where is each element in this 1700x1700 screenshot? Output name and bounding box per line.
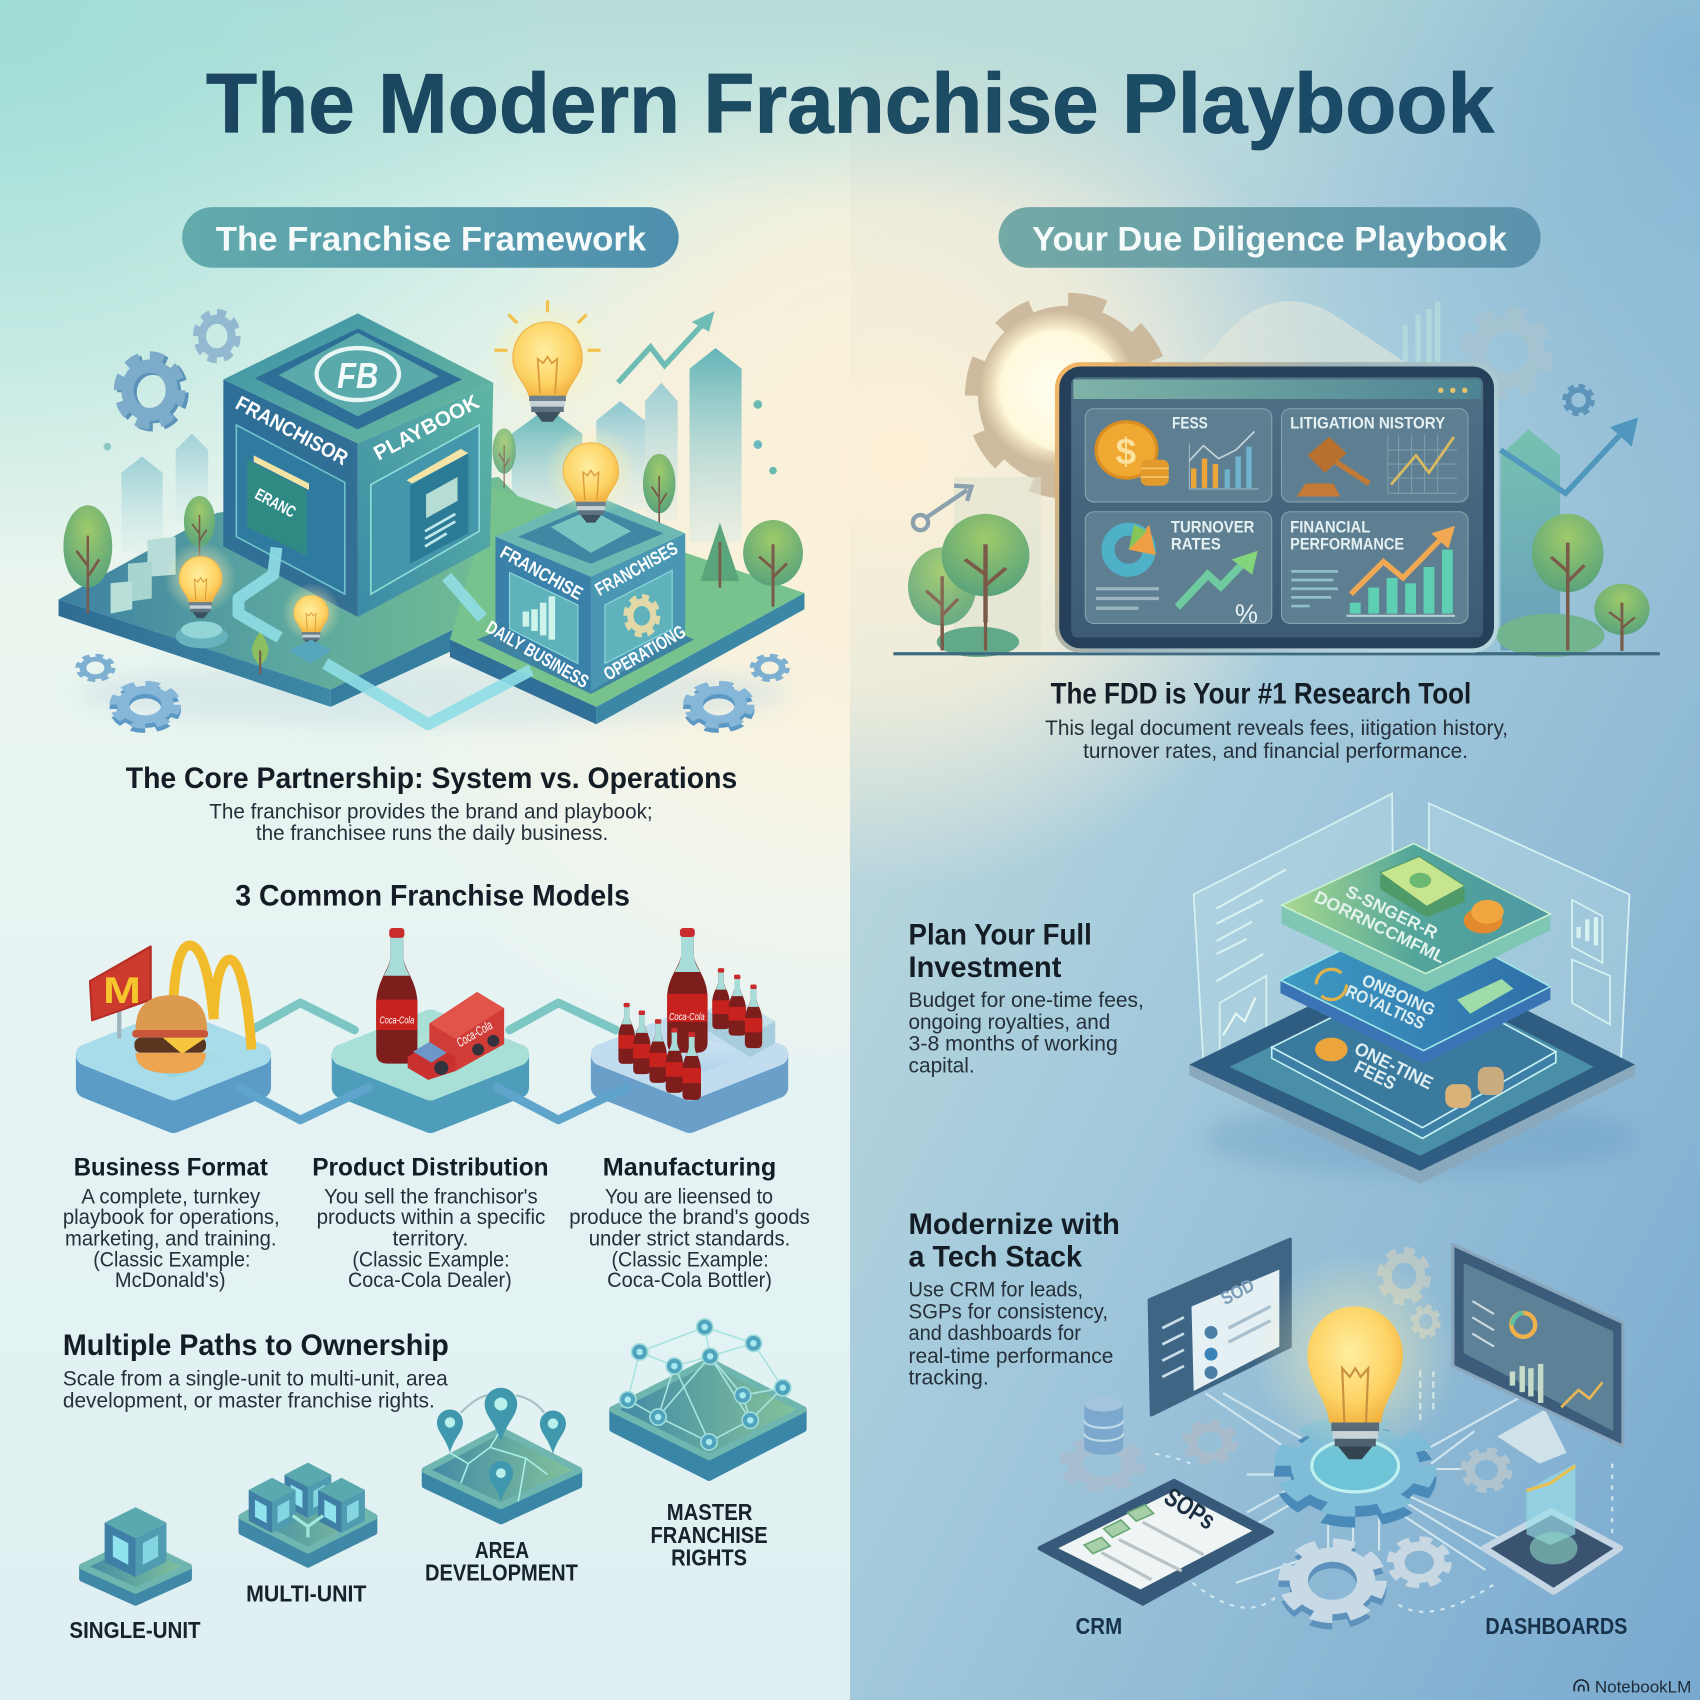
panel: initial investment layer: S-SNGER-R [1343, 881, 1441, 943]
text block: business format: playbook for operations, [63, 1206, 280, 1229]
text block: product distribution: (Classic Example: [352, 1248, 510, 1271]
icon: CRM window: SOD [1217, 1274, 1258, 1309]
icon: growth arrow [618, 311, 714, 383]
text block: manufacturing: under strict standards. [589, 1228, 790, 1251]
icon: CRM window [1149, 1239, 1290, 1415]
illustration: franchisor and franchisee isometric city [59, 298, 804, 730]
text block: manufacturing: You are lieensed to [605, 1185, 773, 1208]
text block: product distribution: Product Distribution [312, 1153, 549, 1181]
watermark: NotebookLM: NotebookLM [1595, 1677, 1691, 1696]
text block: product distribution: products within a specific [317, 1206, 545, 1229]
label: area development [425, 1537, 578, 1586]
diagram: three franchise models [87, 928, 777, 1122]
icon: franchise manual [247, 455, 309, 556]
icon: small gears [1186, 1251, 1509, 1624]
text block: multiple paths to ownership: development, or master franchise rights. [63, 1389, 435, 1412]
label: area development: AREA [475, 1537, 529, 1563]
icon: database on gear [1065, 1396, 1140, 1488]
icon: single-unit [82, 1507, 189, 1602]
panel: litigation history [1282, 409, 1468, 502]
arrow: glowing data ribbons [239, 548, 531, 724]
panel: business format platform [87, 1020, 260, 1122]
icon: key arrow [913, 486, 971, 530]
icon: cola bottle and truck [376, 928, 504, 1080]
text block: modernize with a tech stack: tracking. [909, 1367, 989, 1390]
illustration: tech stack hub [1040, 1239, 1623, 1624]
panel: ongoing royalties layer [1280, 914, 1550, 1064]
text block: manufacturing [569, 1153, 810, 1292]
icon: bottling line [618, 928, 775, 1100]
icon: light bulbs [164, 298, 638, 664]
text block: business format: Business Format [74, 1153, 268, 1181]
label: OPERATIONG: OPERATIONG [600, 621, 689, 684]
heading pill: Your Due Diligence Playbook: Your Due Diligence Playbook [1032, 220, 1508, 258]
icon: tablet base [1189, 954, 1635, 1184]
heading pill: The Franchise Framework [182, 207, 679, 268]
text block: business format [63, 1153, 280, 1292]
text block: core partnership: The Core Partnership: System vs. Operations [126, 763, 737, 795]
icon: restaurant sign and arches: M [103, 970, 141, 1011]
icon: cola bottle and truck: Coca-Cola [379, 1015, 415, 1026]
icon: franchise manual: ERANC [252, 485, 299, 522]
label: master franchise rights: RIGHTS [671, 1545, 747, 1571]
label: PLAYBOOK: PLAYBOOK [370, 390, 483, 465]
icon: master franchise rights network [613, 1319, 803, 1478]
panel: fees: FESS [1172, 414, 1208, 432]
text block: plan your full investment: Plan Your Full [909, 919, 1092, 951]
label: FRANCHISES: FRANCHISES [591, 537, 681, 600]
text block: business format: (Classic Example: [93, 1248, 250, 1271]
panel: franchisor cube [223, 313, 493, 617]
icon: background towers [104, 348, 777, 553]
text block: modernize with a tech stack [909, 1209, 1120, 1390]
panel: litigation history: LITIGATION NISTORY [1290, 414, 1445, 432]
text block: plan your full investment: capital. [909, 1054, 975, 1077]
label: FRANCHISE: FRANCHISE [497, 541, 587, 604]
text block: plan your full investment: Investment [909, 952, 1062, 984]
illustration: investment layers [1189, 794, 1637, 1184]
icon: bottling line: Coca-Cola [669, 1012, 705, 1023]
text block: modernize with a tech stack: Use CRM for leads, [909, 1279, 1083, 1302]
text block: manufacturing: (Classic Example: [611, 1248, 769, 1271]
icon: multi-unit [242, 1463, 374, 1564]
panel: turnover rates: TURNOVER [1171, 518, 1255, 536]
panel: turnover rates: % [1235, 598, 1258, 628]
panel: fees: $ [1116, 431, 1136, 472]
heading pill: The Franchise Framework: The Franchise Framework [216, 220, 647, 258]
icon: brand logo [317, 348, 399, 400]
text block: product distribution: Coca-Cola Dealer) [348, 1269, 512, 1292]
panel: one-time fees layer: ONE-TINE [1351, 1037, 1437, 1093]
heading: 3 common franchise models: 3 Common Franchise Models [235, 880, 630, 912]
icon: burger [132, 995, 208, 1073]
icon: mini gear [626, 597, 658, 634]
text block: plan your full investment: 3-8 months of working [909, 1033, 1118, 1056]
label: area development: DEVELOPMENT [425, 1560, 578, 1586]
illustration: FDD tablet scene [893, 301, 1660, 657]
text block: product distribution: You sell the franchisor's [324, 1185, 538, 1208]
text block: business format: McDonald's) [115, 1269, 226, 1292]
panel: initial investment layer [1282, 843, 1550, 992]
text block: manufacturing: Manufacturing [603, 1153, 776, 1181]
panel: ongoing royalties layer: ONBOING [1359, 970, 1438, 1020]
decorative circuit lines [1149, 1366, 1612, 1612]
heading pill: Your Due Diligence Playbook [999, 207, 1541, 268]
icon: area development [425, 1388, 579, 1521]
title: The Modern Franchise Playbook [206, 55, 1495, 150]
panel: turnover rates: RATES [1171, 536, 1221, 554]
icon: lower gears [78, 656, 787, 730]
text block: modernize with a tech stack: a Tech Stack [909, 1241, 1083, 1273]
panel: one-time fees layer: FEES [1351, 1056, 1399, 1094]
icon: right tower and trend arrow [1501, 417, 1638, 651]
icon: glass side panels [1194, 794, 1630, 1064]
icon: restaurant sign and arches [90, 945, 252, 1049]
panel: initial investment layer: DORRNCCMFML [1311, 887, 1449, 967]
panel: product distribution platform [343, 1020, 518, 1122]
icon: SOP clipboard [1040, 1481, 1272, 1604]
text block: FDD research tool [1045, 679, 1508, 763]
text block: modernize with a tech stack: SGPs for consistency, [909, 1300, 1108, 1323]
icon: large platform [59, 477, 804, 724]
label: single-unit: SINGLE-UNIT [69, 1617, 201, 1643]
icon: stacked blocks [111, 537, 176, 614]
text block: modernize with a tech stack: real-time performance [909, 1345, 1113, 1368]
panel: fees [1085, 409, 1272, 502]
arrow: lower connectors between models [239, 1087, 627, 1120]
text block: multiple paths to ownership: Multiple Paths to Ownership [63, 1330, 449, 1362]
label: multi-unit: MULTI-UNIT [246, 1580, 367, 1606]
icon: cola bottle and truck: Coca-Cola [454, 1017, 495, 1050]
label: master franchise rights: MASTER [667, 1499, 752, 1525]
icon: SOP clipboard: SOPs [1159, 1481, 1221, 1535]
text block: FDD research tool: turnover rates, and financial performance. [1083, 740, 1468, 763]
icon: holographic dashboard [1484, 1464, 1620, 1592]
icon: playbook manual [407, 449, 468, 564]
text block: product distribution: territory. [392, 1228, 468, 1251]
panel: financial performance: PERFORMANCE [1290, 536, 1404, 554]
panel: franchisee cube [483, 493, 689, 692]
text block: multiple paths to ownership: Scale from a single-unit to multi-unit, area [63, 1368, 448, 1391]
text block: core partnership [126, 763, 737, 845]
label: DASHBOARDS: DASHBOARDS [1485, 1613, 1627, 1639]
panel: turnover rates [1085, 512, 1272, 628]
text block: core partnership: the franchisee runs the daily business. [256, 822, 608, 845]
text block: FDD research tool: This legal document reveals fees, iitigation history, [1045, 717, 1508, 740]
text block: plan your full investment: Budget for one-time fees, [909, 989, 1144, 1012]
panel: manufacturing platform [602, 1020, 777, 1122]
text block: FDD research tool: The FDD is Your #1 Research Tool [1051, 679, 1471, 711]
text block: product distribution [312, 1153, 549, 1292]
icon: trees [63, 428, 803, 674]
label: DAILY BUSINESS: DAILY BUSINESS [483, 616, 593, 692]
text block: modernize with a tech stack: and dashboards for [909, 1322, 1081, 1345]
icon: trees and bushes [908, 514, 1650, 657]
panel: ongoing royalties layer: ROYALTISS [1343, 981, 1428, 1033]
text block: business format: A complete, turnkey [81, 1185, 261, 1208]
label: master franchise rights [651, 1499, 768, 1571]
text block: core partnership: The franchisor provides the brand and playbook; [209, 801, 653, 824]
panel: financial performance: FINANCIAL [1290, 518, 1370, 536]
icon: central gear and light bulb [1252, 1252, 1458, 1520]
panel: financial performance [1282, 512, 1468, 623]
label: CRM: CRM [1076, 1613, 1122, 1639]
icon: sun and background gear [954, 301, 1593, 656]
icon: mini bar chart [526, 596, 552, 640]
panel: tablet [1057, 364, 1496, 651]
text block: manufacturing: produce the brand's goods [569, 1206, 810, 1229]
ground line [893, 652, 1660, 655]
icon: upper gears [119, 313, 237, 426]
text block: plan your full investment: ongoing royalties, and [909, 1011, 1110, 1034]
text block: manufacturing: Coca-Cola Bottler) [607, 1269, 772, 1292]
text block: multiple paths to ownership [63, 1330, 449, 1412]
icon: brand logo: FB [337, 356, 378, 396]
text block: modernize with a tech stack: Modernize with [909, 1209, 1120, 1241]
label: master franchise rights: FRANCHISE [651, 1522, 768, 1548]
panel: one-time fees layer [1272, 976, 1556, 1138]
label: FRANCHISOR: FRANCHISOR [232, 392, 352, 470]
arrow: connectors between models [252, 1003, 616, 1030]
icon: analytics monitor [1453, 1245, 1623, 1464]
text block: plan your full investment [909, 919, 1144, 1077]
text block: business format: marketing, and training. [65, 1228, 276, 1251]
